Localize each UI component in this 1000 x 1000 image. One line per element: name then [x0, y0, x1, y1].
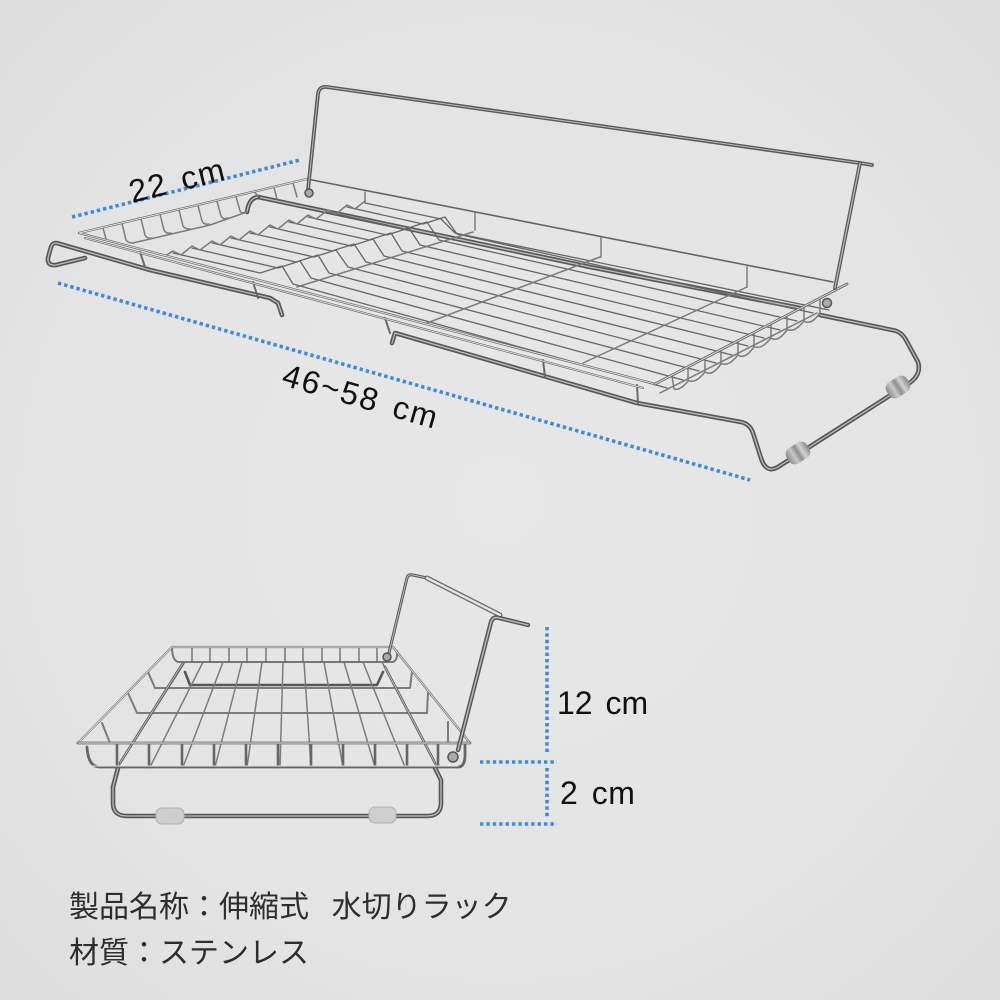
- icon: hinge knobs: [305, 189, 832, 308]
- floor wires: [118, 662, 437, 767]
- dimension tick: bottom: [480, 822, 557, 826]
- front rim and lower bar: [78, 743, 470, 767]
- floor wires: [173, 203, 829, 388]
- side rails: [120, 663, 435, 763]
- dimension tick: middle: [480, 760, 557, 764]
- label: 46~58 cm: 46~58 cm: [278, 357, 444, 436]
- label: 22 cm: 22 cm: [125, 151, 230, 210]
- lower near rail: [85, 238, 643, 388]
- near rim uprights: [140, 252, 638, 403]
- left end basket wires: [103, 183, 297, 243]
- illustration: extended rack, perspective view: [48, 87, 919, 469]
- front uprights: [117, 743, 438, 767]
- stepped basket frames: [102, 647, 448, 743]
- top frame rim: [79, 179, 847, 384]
- dimension line: 22 cm: [72, 160, 300, 217]
- product name and material text: 製品名称：伸縮式 水切りラック 材質：ステンレス: [69, 891, 512, 970]
- legs: [113, 768, 441, 816]
- rear rim uprights: [365, 192, 747, 287]
- dimension line: 46~58 cm: [58, 283, 750, 480]
- rear rim wire: [307, 179, 833, 282]
- rear uprights: [192, 647, 377, 662]
- support tube: left end loop and rail: [48, 243, 282, 315]
- support tube: right end frame: [247, 197, 919, 469]
- dimension line: 2 cm: [545, 768, 549, 818]
- illustration: rack end view: [78, 575, 528, 824]
- right end basket wiggles: [672, 300, 820, 389]
- backrest side view: [388, 575, 528, 750]
- icon: transparent clips: [156, 807, 396, 824]
- icon: rubber caps on end bar: [783, 373, 913, 467]
- label: 12 cm: 12 cm: [557, 685, 648, 721]
- label: 2 cm: 2 cm: [560, 775, 635, 811]
- dimension line: 12 cm: [545, 627, 549, 752]
- cross rods: [133, 201, 817, 393]
- icon: hinge: [383, 653, 458, 762]
- rim: rear and sides: [78, 647, 470, 743]
- backrest frame: [308, 87, 872, 288]
